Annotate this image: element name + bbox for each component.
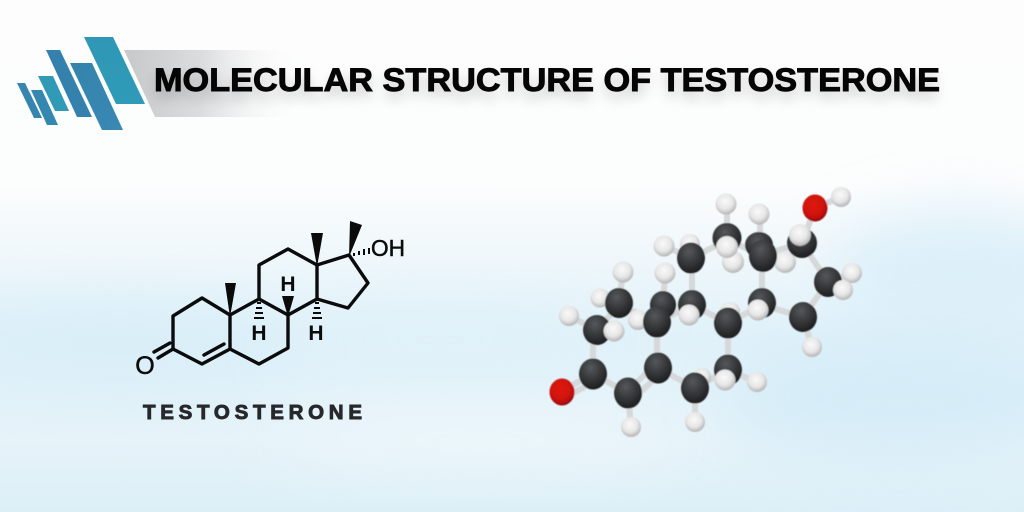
oxygen atoms [550,194,828,406]
atom labels: OH [371,235,405,261]
title: MOLECULAR STRUCTURE OF TESTOSTERONE [154,62,940,98]
atom labels: H [280,273,296,296]
atom labels: H [251,322,267,345]
ball and stick model of testosterone [550,187,862,437]
title banner [124,50,300,117]
atom labels [135,235,405,380]
back bonds [562,197,852,427]
atom labels: O [135,352,155,380]
atom labels: H [308,322,324,345]
logo [17,37,145,130]
wedge bonds [225,221,362,317]
skeletal formula of testosterone [135,221,405,380]
back hydrogens [559,187,862,437]
front hydrogens [604,224,853,390]
carbon atoms [579,223,842,408]
title: MOLECULAR STRUCTURE OF TESTOSTERONE [154,69,940,106]
ring bonds [154,249,368,364]
label: testosterone: TESTOSTERONE [143,401,362,424]
hashed bonds [254,248,369,318]
